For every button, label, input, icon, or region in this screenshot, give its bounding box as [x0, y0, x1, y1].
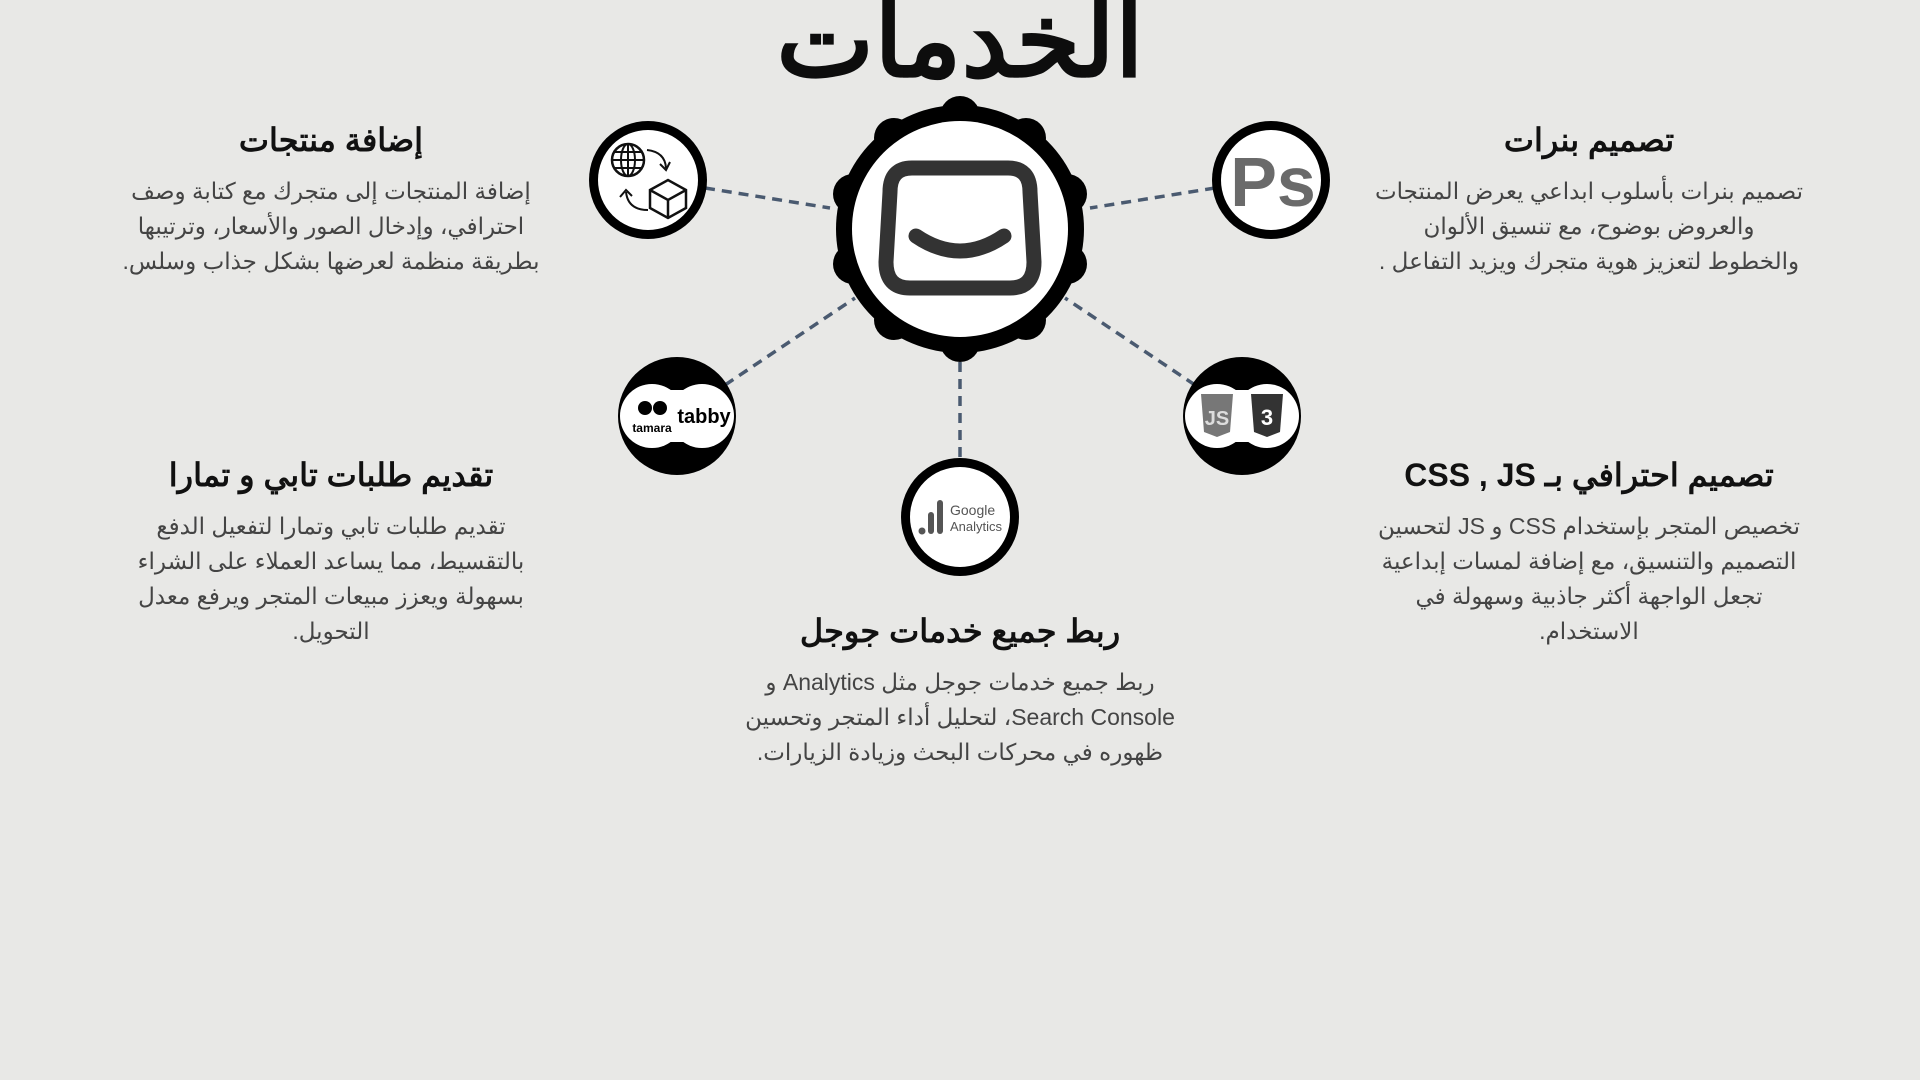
panel: add products	[122, 122, 540, 275]
node: google analytics: Analytics	[950, 519, 1003, 534]
node: tamara tabby: tamara	[632, 421, 672, 435]
node: products globe	[589, 121, 707, 239]
body: google services: ظهوره في محركات البحث وزيادة الزيارات.	[757, 739, 1163, 765]
body: banners: تصميم بنرات بأسلوب ابداعي يعرض المنتجات	[1375, 178, 1803, 204]
heading: tabby tamara: تقديم طلبات تابي و تمارا	[169, 457, 493, 493]
node: google analytics	[901, 458, 1019, 576]
node: photoshop: Ps	[1230, 143, 1316, 221]
body: banners: والخطوط لتعزيز هوية متجرك ويزيد التفاعل .	[1379, 248, 1799, 274]
body: add products: احترافي، وإدخال الصور والأسعار، وترتيبها	[138, 213, 524, 239]
panel: google services	[745, 613, 1175, 766]
node: tamara tabby	[618, 357, 736, 475]
node: js css: JS	[1205, 408, 1229, 430]
body: tabby tamara	[138, 513, 524, 645]
panel: css js	[1378, 457, 1800, 644]
body: tabby tamara: بالتقسيط، مما يساعد العملاء على الشراء	[138, 548, 524, 574]
body: tabby tamara: التحويل.	[292, 618, 370, 644]
body: css js: الاستخدام.	[1539, 618, 1639, 644]
node: js css	[1183, 357, 1301, 475]
node: google analytics: Google	[950, 502, 995, 518]
body: tabby tamara: بسهولة ويعزز مبيعات المتجر ويرفع معدل	[138, 583, 524, 609]
panel: tabby tamara	[138, 457, 524, 645]
body: tabby tamara: تقديم طلبات تابي وتمارا لتفعيل الدفع	[156, 513, 506, 539]
node: js css: 3	[1261, 405, 1273, 430]
connectors	[705, 188, 1215, 458]
heading: add products: إضافة منتجات	[239, 122, 423, 158]
node: photoshop	[1212, 121, 1330, 239]
body: google services	[745, 669, 1175, 766]
body: add products: إضافة المنتجات إلى متجرك مع كتابة وصف	[131, 178, 531, 204]
body: banners	[1375, 176, 1803, 275]
body: google services: Search Console، لتحليل أداء المتجر وتحسين	[745, 704, 1175, 730]
heading: banners: تصميم بنرات	[1504, 122, 1674, 158]
body: add products: بطريقة منظمة لعرضها بشكل جذاب وسلس.	[122, 248, 540, 274]
center badge	[833, 96, 1087, 362]
body: google services: ربط جميع خدمات جوجل مثل Analytics و	[765, 669, 1155, 695]
icon: bag	[886, 168, 1034, 288]
body: css js: التصميم والتنسيق، مع إضافة لمسات إبداعية	[1382, 548, 1796, 574]
body: css js	[1378, 513, 1800, 644]
heading: css js: تصميم احترافي بـ CSS , JS	[1404, 457, 1774, 493]
heading: google services: ربط جميع خدمات جوجل	[800, 613, 1120, 649]
body: css js: تخصيص المتجر بإستخدام CSS و JS لتحسين	[1378, 513, 1800, 539]
body: banners: والعروض بوضوح، مع تنسيق الألوان	[1424, 213, 1754, 239]
panel: banners	[1375, 122, 1803, 275]
body: css js: تجعل الواجهة أكثر جاذبية وسهولة في	[1415, 583, 1762, 609]
node: tamara tabby: tabby	[677, 406, 732, 428]
body: add products	[122, 178, 540, 275]
